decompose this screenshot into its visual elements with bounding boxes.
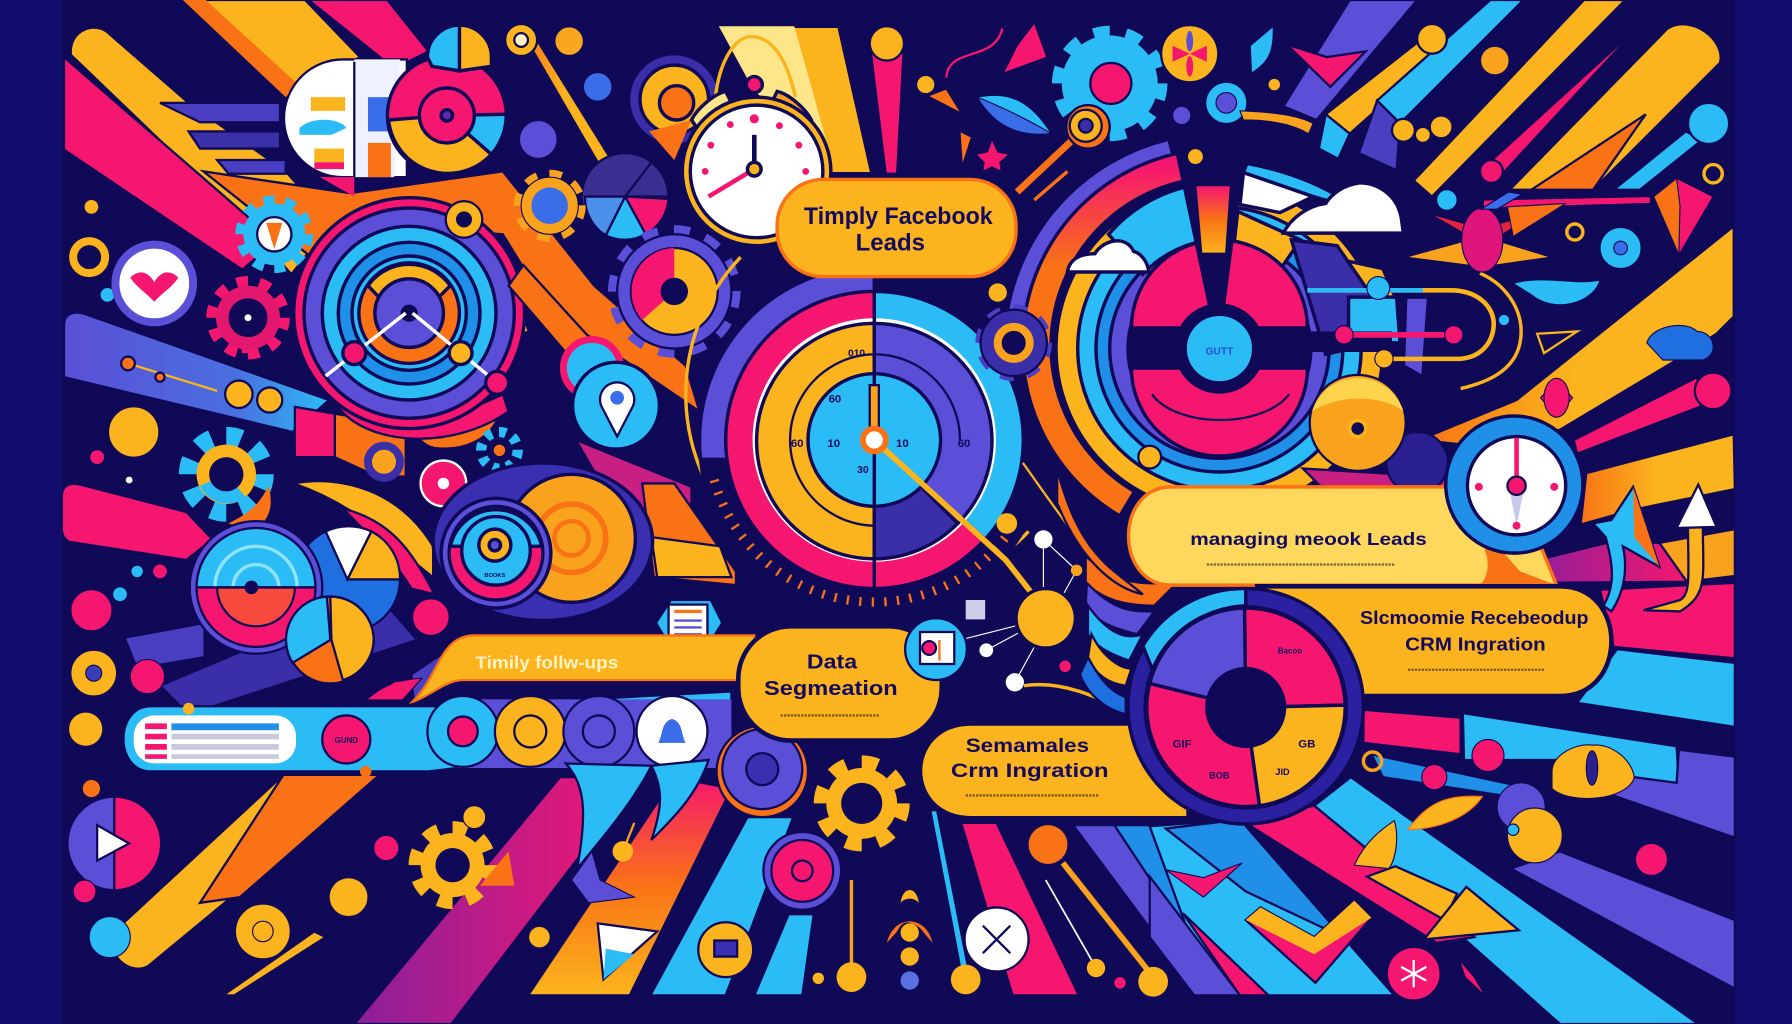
icon: flower disc xyxy=(1161,25,1218,82)
chart: lower left rings and pies xyxy=(190,521,400,683)
speech tails xyxy=(566,760,709,869)
big dial lines xyxy=(1307,273,1521,389)
icon: yellow gear key xyxy=(1017,105,1110,200)
yellow ball on dial xyxy=(1138,446,1161,469)
label: timely follow-ups ribbon xyxy=(413,635,754,702)
dots: scattered left xyxy=(90,450,371,777)
icon: arrow head xyxy=(1424,887,1519,939)
top centre pink bar xyxy=(870,26,904,174)
gear: cyan xyxy=(241,201,307,267)
top centre small icons xyxy=(917,23,1273,171)
icon: play badge xyxy=(67,797,161,890)
central dial tick labels: 60 xyxy=(791,438,804,450)
chart: top left pie xyxy=(387,25,506,175)
label: timely facebook leads: Leads xyxy=(856,229,925,256)
chart: large donut pie: Bacoo xyxy=(1278,647,1302,656)
central dial tick labels xyxy=(791,349,970,476)
clock: right white xyxy=(1446,416,1583,553)
label: seamless CRM integration right: Slcmoomie Recebeodup xyxy=(1360,607,1589,628)
label: timely facebook leads xyxy=(777,179,1016,277)
central dial tick labels: 010 xyxy=(848,349,865,360)
icon: pink badges bottom xyxy=(1363,739,1667,1000)
label: data segmentation: Segmeation xyxy=(764,677,898,700)
radiating bars: bottom right xyxy=(1240,710,1735,1024)
dial centre label: GUTT xyxy=(1205,346,1234,357)
icon: gem xyxy=(1654,178,1713,255)
big dial: outer rings xyxy=(1016,145,1423,552)
chart: gold dial xyxy=(1303,375,1520,503)
label: seamless CRM integration right xyxy=(1257,586,1611,696)
icon: map pin badge xyxy=(563,339,659,449)
dots: right column xyxy=(1173,82,1713,417)
icon: data chart badge xyxy=(905,618,967,680)
label: managing leads xyxy=(1129,487,1557,585)
chart: lower centre rings xyxy=(433,463,653,621)
label: timely facebook leads: Timply Facebook xyxy=(804,203,993,230)
central dial chart xyxy=(686,257,1047,617)
stripes behind large pie xyxy=(1057,469,1177,714)
radiating bars: bottom left xyxy=(112,720,1394,1024)
top right dots xyxy=(1267,24,1731,409)
arrows: right xyxy=(1593,485,1717,611)
pink gem right xyxy=(1544,378,1569,417)
gear: purple orange ring xyxy=(979,283,1048,377)
gear: cyan top right xyxy=(1059,33,1160,134)
icon: leaf bottom right xyxy=(1408,796,1482,830)
gear: bottom centre xyxy=(822,763,902,843)
label: seamless CRM integration lower: Crm Ingration xyxy=(951,760,1109,782)
gear: purple with pink centre xyxy=(615,232,734,351)
icon: winged gem xyxy=(1406,192,1650,272)
label: data segmentation: Data xyxy=(807,651,858,674)
icon: heart badge xyxy=(115,245,193,322)
icon: document xyxy=(656,600,722,654)
big dial: right xyxy=(1056,139,1429,512)
icon: pink chevron xyxy=(1287,45,1366,87)
icon: cloud badge right xyxy=(1552,745,1634,799)
chart: large donut pie: GB xyxy=(1298,738,1315,750)
blue toolbar with list and steps: GUND xyxy=(335,736,358,745)
chart: large donut pie: JID xyxy=(1275,767,1290,777)
label: seamless CRM integration right: CRM Ingration xyxy=(1405,633,1546,654)
central dial tick labels: 10 xyxy=(896,438,909,450)
blue toolbar with list and steps xyxy=(123,691,731,771)
top left yellow pins xyxy=(73,24,613,302)
vertical pins xyxy=(529,823,1168,997)
icon: pink circle bottom xyxy=(698,832,841,977)
central dial tick labels: 60 xyxy=(958,438,970,450)
label: seamless CRM integration lower: Semamales xyxy=(966,735,1089,757)
small circles bottom left xyxy=(69,407,486,959)
number label: 100 xyxy=(401,653,424,668)
chart: large donut pie: GIF xyxy=(1173,738,1192,750)
icon: paper plane xyxy=(598,923,657,979)
icon: pen nib xyxy=(1354,821,1397,869)
chart: concentric target left xyxy=(294,198,526,429)
label: managing leads: managing meook Leads xyxy=(1190,529,1427,549)
gear: bottom left xyxy=(416,829,514,902)
gear: pink xyxy=(213,282,283,353)
radiating bars: top left xyxy=(64,0,699,411)
gear: yellow cyan left xyxy=(189,437,271,531)
radiating bars: left lower xyxy=(62,389,736,714)
chart: large donut pie: BOB xyxy=(1209,770,1230,780)
icon: check mark xyxy=(1246,901,1371,983)
chart: top left whiteboard xyxy=(284,59,407,197)
clock: top centre xyxy=(629,26,872,246)
small gears middle left xyxy=(368,432,518,506)
gear: orange blue xyxy=(519,175,581,237)
icon: close button xyxy=(965,907,1029,971)
label: timely follow-ups ribbon: Timily follw-ups xyxy=(475,653,618,673)
chart: lower centre rings: BOOKS xyxy=(484,573,506,579)
left blue bar with nodes xyxy=(64,313,329,432)
pink tag xyxy=(368,679,421,699)
dark disc: purple xyxy=(717,726,808,817)
central dial tick labels: 60 xyxy=(829,393,841,405)
label: seamless CRM integration lower xyxy=(920,723,1189,818)
chart: large donut pie xyxy=(1128,589,1363,824)
label: data segmentation xyxy=(738,626,942,741)
pie chart: dark wedge xyxy=(582,153,669,240)
icon: pink lips xyxy=(1166,863,1242,897)
icon: small yellow ring xyxy=(446,201,594,366)
icon: blue origami xyxy=(571,851,634,903)
clouds xyxy=(1067,183,1403,272)
network graph and knob xyxy=(960,463,1131,714)
radiating bars: top right xyxy=(1283,0,1735,727)
central dial tick labels: 10 xyxy=(827,438,840,450)
central dial tick labels: 30 xyxy=(857,465,869,476)
